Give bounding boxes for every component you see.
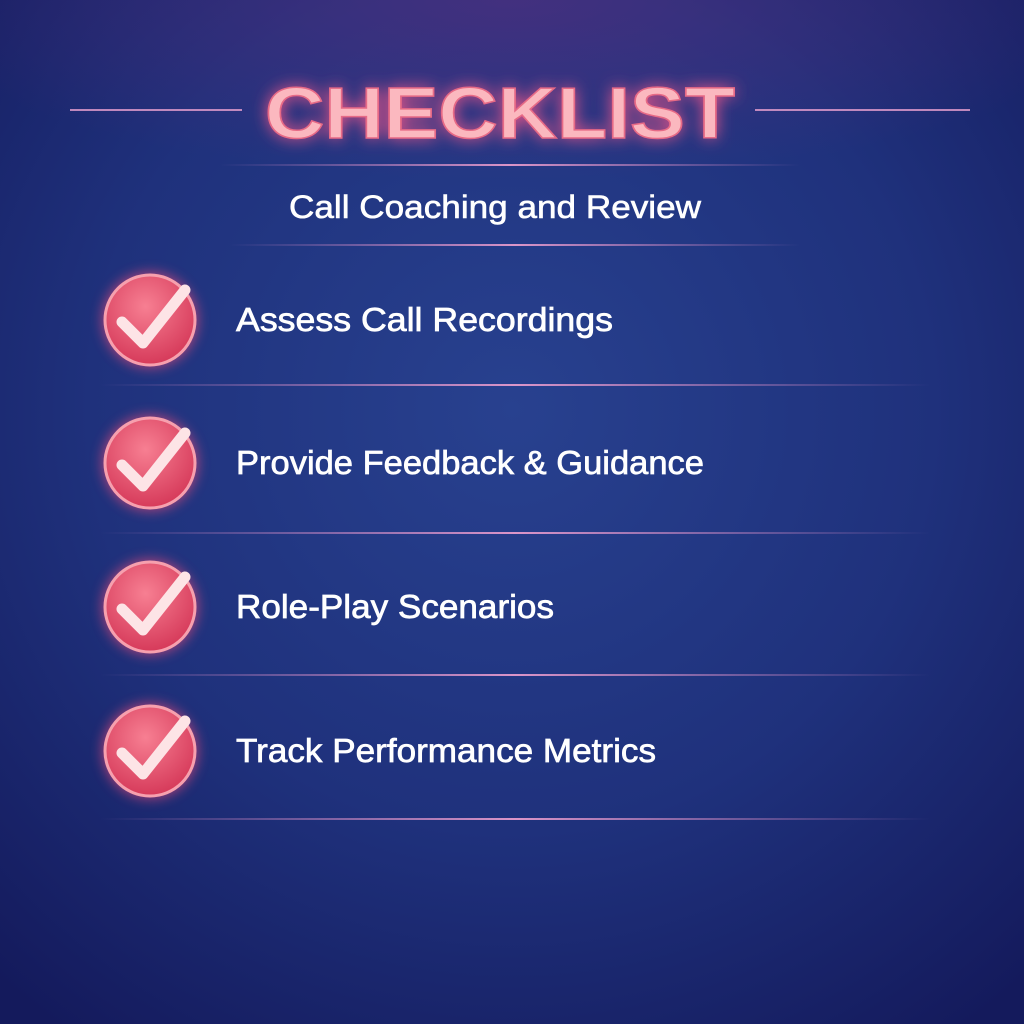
item 4: Track Performance Metrics bbox=[236, 732, 656, 769]
title: CHECKLIST bbox=[265, 74, 735, 154]
subtitle: Call Coaching and Review bbox=[289, 189, 702, 225]
item 1 bbox=[102, 272, 613, 368]
item 2 bbox=[102, 415, 704, 511]
item 4 bbox=[102, 703, 656, 799]
item 2: Provide Feedback & Guidance bbox=[236, 444, 704, 481]
item 3: Role-Play Scenarios bbox=[236, 588, 554, 625]
title bbox=[70, 74, 970, 154]
item 3 bbox=[102, 559, 554, 655]
item 1: Assess Call Recordings bbox=[236, 301, 613, 338]
title: CHECKLIST bbox=[265, 74, 735, 154]
